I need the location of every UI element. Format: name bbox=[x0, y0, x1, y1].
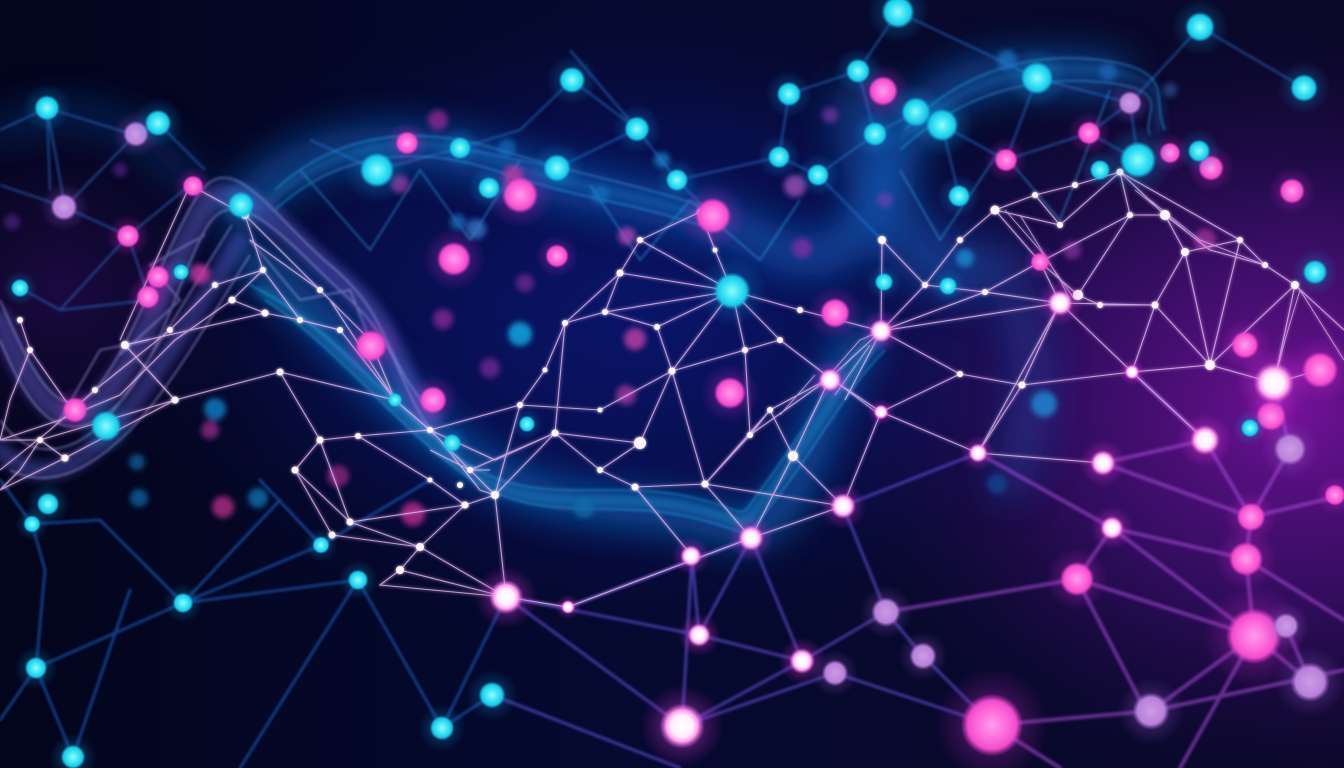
lavender left ribbon bbox=[0, 68, 1160, 522]
blurred blue ribbons bbox=[0, 72, 1110, 529]
dim lower network lines bbox=[0, 372, 1344, 768]
out-of-focus nodes bbox=[4, 50, 1216, 526]
small foreground nodes bbox=[17, 168, 1299, 574]
ribbon mesh strands bbox=[0, 58, 1165, 532]
foreground network lines bbox=[0, 172, 1344, 607]
out-of-focus background lines bbox=[0, 12, 1304, 310]
